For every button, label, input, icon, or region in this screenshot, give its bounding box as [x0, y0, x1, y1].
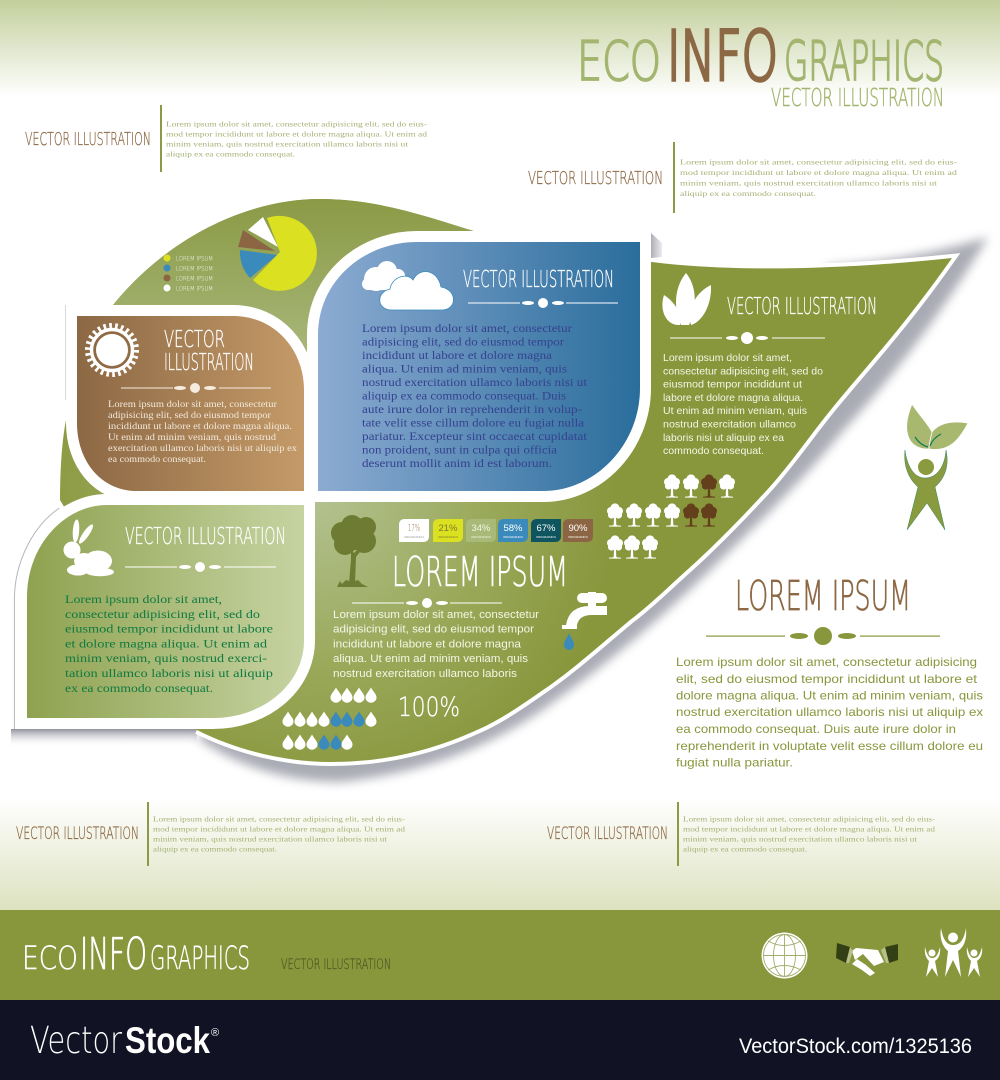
tag 58%: INFOGRAPHICS	[503, 535, 523, 539]
text block: bottom right: minim veniam, quis nostrud exercitation ullamco laboris nisi ut	[683, 834, 918, 844]
center text: adipisicing elit, sed do eiusmod tempor	[333, 624, 534, 636]
text block: bottom left: Lorem ipsum dolor sit amet, consectetur adipisicing elit, sed do eius-	[153, 814, 406, 824]
right text block: fugiat nulla pariatur.	[676, 756, 793, 770]
text block: bottom left: VECTOR ILLUSTRATION	[16, 824, 139, 844]
watermark bar	[0, 1000, 1000, 1080]
text block: top right	[528, 142, 958, 213]
text: Ut enim ad minim veniam, quis nostrud	[108, 433, 276, 443]
tag 21%	[433, 519, 463, 542]
text: non proident, sunt in culpa qui officia	[362, 444, 557, 456]
right leaf text: nostrud exercitation ullamco	[663, 418, 796, 430]
text block: bottom left: minim veniam, quis nostrud exercitation ullamco laboris nisi ut	[153, 834, 388, 844]
right divider	[706, 627, 940, 645]
pie legend: LOREM IPSUM	[176, 274, 213, 282]
title	[577, 17, 944, 97]
text: tate velit esse cillum dolore eu fugiat nulla	[362, 418, 584, 430]
tag 67%	[531, 519, 561, 542]
icon: people	[925, 928, 982, 977]
right text block: nostrud exercitation ullamco laboris nisi ut aliquip ex	[676, 705, 983, 719]
text: consectetur adipisicing elit, sed do	[65, 607, 260, 621]
tag 67%: INFOGRAPHICS	[536, 535, 556, 539]
panel: brown sun	[66, 305, 304, 491]
right text block: ea commodo consequat. Duis aute irure dolor in	[676, 722, 956, 736]
text: Lorem ipsum dolor sit amet,	[65, 592, 222, 606]
text block: top left: aliquip ex ea commodo consequat.	[166, 150, 295, 158]
center divider	[352, 598, 502, 608]
fold	[651, 233, 662, 258]
text block: bottom right: Lorem ipsum dolor sit amet, consectetur adipisicing elit, sed do eius-	[683, 814, 936, 824]
text: incididunt ut labore et dolore magna	[362, 350, 552, 362]
text: nostrud exercitation ullamco laboris nisi ut	[362, 377, 588, 389]
divider	[121, 383, 271, 393]
text block: top left: mod tempor incididunt ut labore et dolore magna aliqua. Ut enim ad	[166, 130, 427, 138]
panel: green leaf	[60, 199, 952, 762]
text: minim veniam, quis nostrud exerci-	[65, 651, 267, 665]
text block: top left: VECTOR ILLUSTRATION	[25, 129, 151, 150]
text block: bottom right: VECTOR ILLUSTRATION	[547, 824, 668, 844]
text block: top right: minim veniam, quis nostrud exercitation ullamco laboris nisi ut	[680, 178, 938, 188]
logo: Stock	[125, 1020, 210, 1061]
footer title	[22, 929, 250, 980]
text: incididunt ut labore et dolore magna aliqua.	[108, 422, 292, 432]
tag 90%	[563, 519, 593, 542]
logo	[30, 1019, 219, 1062]
title: INFO	[667, 17, 778, 97]
tag 21%: INFOGRAPHICS	[438, 535, 458, 539]
tag 34%: INFOGRAPHICS	[471, 535, 491, 539]
text block: bottom left	[16, 802, 406, 866]
text block: top right: Lorem ipsum dolor sit amet, consectetur adipisicing elit, sed do eius-	[680, 158, 958, 166]
percent tags	[399, 519, 593, 542]
center text: aliqua. Ut enim ad minim veniam, quis	[333, 653, 529, 665]
divider	[468, 298, 618, 308]
lower-left panel shadow	[11, 729, 197, 747]
text: ea commodo consequat.	[108, 455, 206, 465]
pie legend	[164, 254, 213, 292]
panel: blue sky	[318, 242, 640, 491]
right leaf divider	[670, 332, 825, 344]
right leaf text	[663, 352, 823, 457]
pie chart	[238, 216, 317, 291]
right leaf text: laboris nisi ut aliquip ex ea	[663, 432, 784, 444]
text: adipisicing elit, sed do eiusmod tempor	[108, 411, 272, 421]
tag 17%	[399, 519, 429, 542]
footer title: GRAPHICS	[150, 939, 250, 977]
right text block: dolore magna aliqua. Ut enim ad minim veniam, quis	[676, 688, 983, 702]
text: aliquip ex ea commodo consequat. Duis	[362, 390, 567, 402]
image id: VectorStock.com/1325136	[739, 1035, 972, 1058]
divider	[125, 562, 276, 572]
tag 90%: 90%	[568, 523, 588, 534]
icon: person holding leaves	[905, 404, 968, 530]
tag 17%: INFOGRAPHICS	[404, 535, 424, 539]
text: ex ea commodo consequat.	[65, 681, 213, 695]
icon: leaves	[662, 273, 711, 325]
panel: upper leaf lobe	[113, 199, 477, 400]
icon: globe	[762, 932, 808, 978]
right leaf text: labore et dolore magna aliqua.	[663, 392, 803, 404]
logo: Vector	[30, 1019, 123, 1062]
right text block: Lorem ipsum dolor sit amet, consectetur adipisicing	[676, 655, 977, 669]
text: tation ullamco laboris nisi ut aliquip	[65, 666, 273, 680]
heading: VECTOR	[164, 327, 225, 353]
tag 58%: 58%	[503, 523, 523, 534]
text block: bottom right: mod tempor incididunt ut labore et dolore magna aliqua. Ut enim ad	[683, 824, 935, 834]
text: deserunt mollit anim id est laborum.	[362, 458, 552, 470]
tag 90%: INFOGRAPHICS	[568, 535, 588, 539]
heading: VECTOR ILLUSTRATION	[125, 524, 286, 550]
right leaf heading: VECTOR ILLUSTRATION	[727, 294, 877, 320]
tag 34%: 34%	[471, 523, 491, 534]
text: Lorem ipsum dolor sit amet, consectetur	[108, 400, 278, 410]
footer title: INFO	[80, 929, 147, 980]
logo: ®	[211, 1027, 219, 1039]
text block: top left	[25, 105, 427, 172]
text block: bottom left: mod tempor incididunt ut labore et dolore magna aliqua. Ut enim ad	[153, 824, 405, 834]
text block: top left: Lorem ipsum dolor sit amet, consectetur adipisicing elit, sed do eius-	[166, 120, 427, 128]
text block: bottom right	[547, 802, 936, 866]
text block: top right: VECTOR ILLUSTRATION	[528, 168, 663, 189]
text: aliqua. Ut enim ad minim veniam, quis	[362, 364, 568, 376]
leaf white edge	[197, 258, 952, 762]
center text: nostrud exercitation ullamco laboris	[333, 668, 518, 680]
right text block: elit, sed do eiusmod tempor incididunt ut labore et	[676, 672, 978, 686]
text block: top left: minim veniam, quis nostrud exercitation ullamco laboris nisi ut	[166, 140, 409, 148]
text block: top right: aliquip ex ea commodo consequat.	[680, 189, 816, 198]
text: aute irure dolor in reprehenderit in volup-	[362, 404, 582, 416]
text block: bottom right: aliquip ex ea commodo consequat.	[683, 844, 807, 854]
text: eiusmod tempor incididunt ut labore	[65, 622, 273, 636]
icon: clouds	[362, 261, 454, 310]
leaf shadow	[197, 237, 988, 782]
heading: VECTOR ILLUSTRATION	[463, 267, 614, 293]
footer title: ECO	[22, 939, 78, 977]
tag 58%	[498, 519, 528, 542]
tag 21%: 21%	[438, 523, 458, 534]
heading	[164, 327, 254, 376]
text: pariatur. Excepteur sint occaecat cupidatat	[362, 431, 588, 443]
text: Lorem ipsum dolor sit amet, consectetur	[362, 323, 572, 335]
icon: faucet	[562, 592, 607, 650]
text	[65, 592, 273, 695]
text	[362, 323, 588, 470]
footer subtitle: VECTOR ILLUSTRATION	[281, 957, 391, 973]
text	[108, 400, 297, 465]
text: adipisicing elit, sed do eiusmod tempor	[362, 336, 564, 348]
right leaf text: commodo consequat.	[663, 445, 764, 457]
text: exercitation ullamco laboris nisi ut aliquip ex	[108, 444, 297, 454]
heading: ILLUSTRATION	[164, 350, 254, 376]
icon: tree	[331, 515, 376, 587]
right leaf text: Ut enim ad minim veniam, quis	[663, 405, 807, 417]
pie legend: LOREM IPSUM	[176, 284, 213, 292]
text: et dolore magna aliqua. Ut enim ad	[65, 636, 267, 650]
right leaf text: Lorem ipsum dolor sit amet,	[663, 352, 792, 364]
text block: bottom left: aliquip ex ea commodo consequat.	[153, 844, 277, 854]
pie legend: LOREM IPSUM	[176, 254, 213, 262]
pie legend: LOREM IPSUM	[176, 264, 213, 272]
center heading: LOREM IPSUM	[392, 548, 568, 596]
right leaf text: consectetur adipisicing elit, sed do	[663, 365, 823, 377]
tag 67%: 67%	[536, 523, 556, 534]
right leaf text: eiusmod tempor incididunt ut	[663, 379, 802, 391]
panel: light green rabbit	[14, 505, 304, 729]
100% label: 100%	[398, 692, 460, 723]
icon: water drops	[282, 688, 376, 750]
center text: Lorem ipsum dolor sit amet, consectetur	[333, 609, 539, 621]
title: ECO	[577, 30, 661, 93]
tag 17%: 17%	[408, 523, 420, 534]
icon: small trees	[607, 474, 735, 559]
icon: rabbit	[64, 519, 114, 576]
center text	[333, 609, 539, 680]
icon: sun	[88, 326, 136, 374]
right text block: reprehenderit in voluptate velit esse cillum dolore eu	[676, 739, 983, 753]
icon: handshake	[836, 943, 898, 976]
tag 34%	[466, 519, 496, 542]
right text block	[676, 655, 983, 770]
text block: top right: mod tempor incididunt ut labore et dolore magna aliqua. Ut enim ad	[680, 168, 957, 177]
center text: incididunt ut labore et dolore magna	[333, 638, 522, 650]
footer band	[0, 910, 1000, 1000]
